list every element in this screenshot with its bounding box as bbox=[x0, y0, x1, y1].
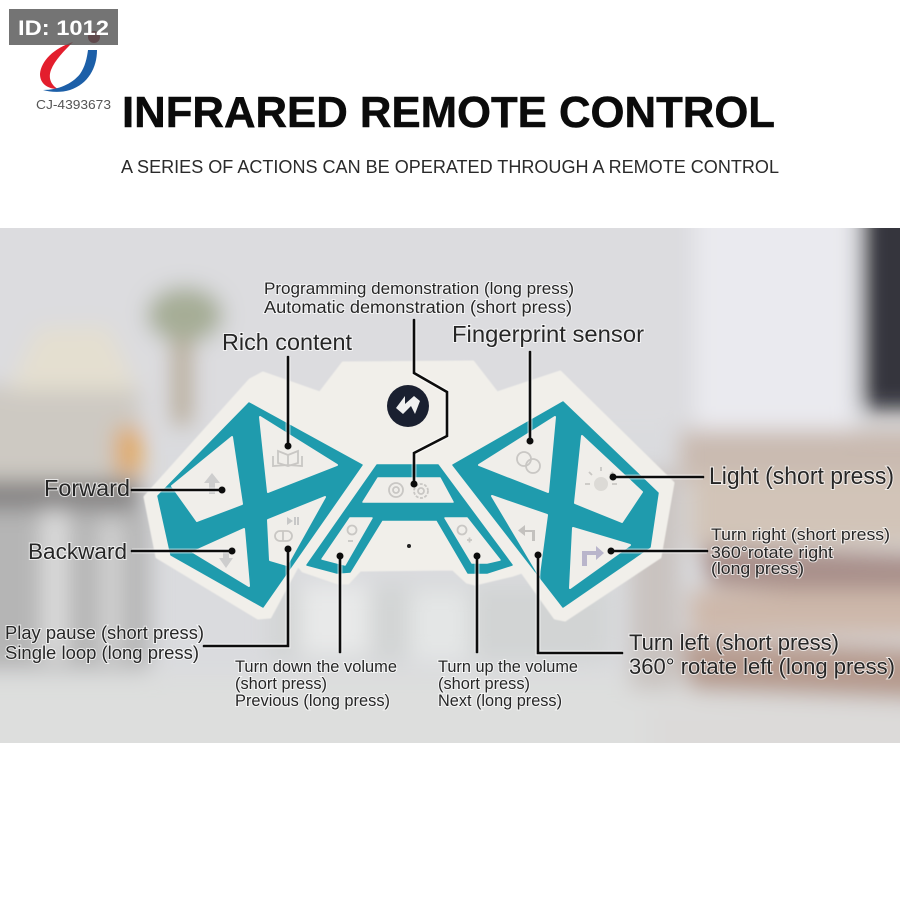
logo bbox=[36, 42, 111, 112]
title: INFRARED REMOTE CONTROL bbox=[122, 88, 775, 137]
label: fingerprint sensor: Fingerprint sensor bbox=[452, 321, 644, 347]
subtitle: A SERIES OF ACTIONS CAN BE OPERATED THROUGH A REMOTE CONTROL bbox=[121, 157, 779, 177]
label: turn down the volume bbox=[235, 658, 397, 710]
icon: light bulb bbox=[585, 467, 617, 491]
label: light: Light (short press) bbox=[709, 463, 894, 490]
power button bbox=[387, 385, 429, 427]
label: turn up the volume bbox=[438, 658, 578, 710]
label: turn left: Turn left (short press) bbox=[629, 630, 839, 655]
icon: book bbox=[273, 451, 302, 466]
icon: play pause and loop bbox=[275, 517, 299, 541]
icon: programming bbox=[389, 483, 403, 497]
ID badge bbox=[9, 9, 118, 45]
remote white body bbox=[145, 362, 673, 620]
label: turn up the volume: Next (long press) bbox=[438, 692, 562, 710]
icon: down arrow bbox=[219, 551, 233, 568]
label: turn left bbox=[629, 630, 895, 679]
icon: turn left arrow bbox=[518, 525, 535, 541]
icon: up arrow bbox=[204, 473, 220, 494]
icon: volume down bbox=[348, 526, 356, 541]
label: turn down the volume: Turn down the volume bbox=[235, 658, 397, 676]
label: turn right: 360°rotate right bbox=[711, 543, 833, 562]
icon: turn right arrow bbox=[582, 546, 604, 566]
label: turn right: Turn right (short press) bbox=[711, 525, 890, 544]
label: forward: Forward bbox=[44, 475, 130, 501]
label: turn up the volume: Turn up the volume bbox=[438, 658, 578, 676]
panel: centre button cluster bbox=[307, 385, 512, 573]
leader lines bbox=[132, 320, 707, 653]
panel: right button cluster bbox=[453, 402, 658, 607]
label: turn right: (long press) bbox=[711, 559, 804, 578]
label: automatic demonstration: Automatic demonstration (short press) bbox=[264, 297, 572, 317]
label: play pause bbox=[5, 622, 204, 663]
photo background panel bbox=[0, 228, 900, 743]
label: play pause: Single loop (long press) bbox=[5, 642, 199, 663]
label: rich content: Rich content bbox=[222, 329, 352, 355]
logo code text: CJ-4393673 bbox=[36, 97, 111, 112]
icon: fingerprint bbox=[517, 452, 540, 473]
label: turn right bbox=[711, 525, 890, 578]
icon: volume up bbox=[458, 526, 472, 542]
label: play pause: Play pause (short press) bbox=[5, 622, 204, 643]
panel: left button cluster bbox=[158, 403, 362, 607]
logo red dot bbox=[88, 31, 100, 43]
label: turn down the volume: (short press) bbox=[235, 675, 327, 693]
icon: automatic gear bbox=[414, 484, 428, 498]
indicator dot bbox=[407, 544, 411, 548]
label: programming demonstration: Programming demonstration (long press) bbox=[264, 279, 574, 298]
remote control bbox=[5, 9, 895, 710]
label: turn left: 360° rotate left (long press) bbox=[629, 654, 895, 679]
label: turn down the volume: Previous (long press) bbox=[235, 692, 390, 710]
label: backward: Backward bbox=[28, 539, 127, 564]
ID badge: ID: 1012 bbox=[18, 17, 109, 40]
label: turn up the volume: (short press) bbox=[438, 675, 530, 693]
